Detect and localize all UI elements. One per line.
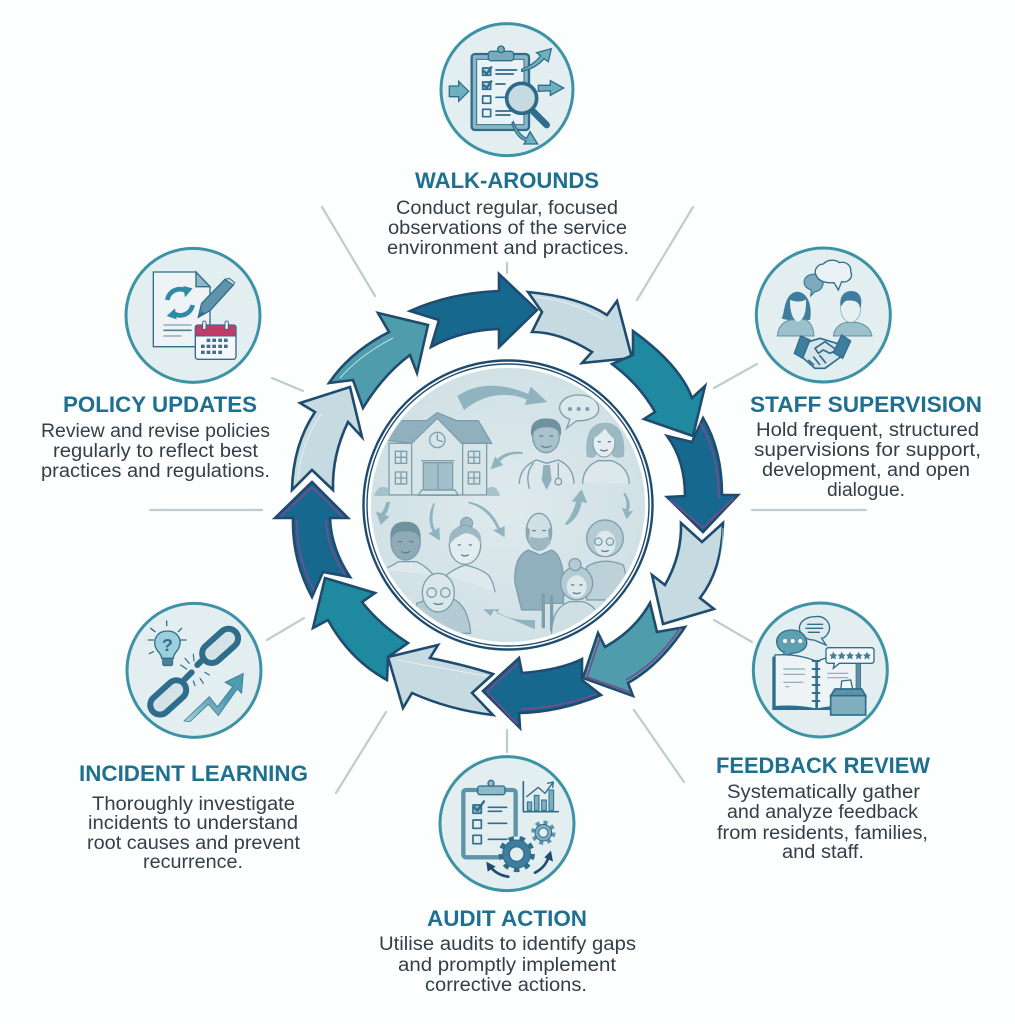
step: staff supervision	[750, 248, 982, 501]
text block: recurrence.	[143, 852, 243, 873]
arrow 6 mid teal	[583, 603, 685, 696]
nurse with bun	[447, 517, 495, 592]
heading: FEEDBACK REVIEW	[716, 753, 930, 778]
heading: WALK-AROUNDS	[415, 168, 599, 193]
speech bubble	[560, 395, 599, 428]
text block: supervisions for support,	[754, 440, 981, 461]
icon: bulb, broken chain, rising arrow	[127, 603, 261, 737]
text block: and staff.	[782, 842, 864, 863]
older woman seated	[551, 558, 596, 634]
step: walk-arounds	[387, 24, 629, 259]
text block: and analyze feedback	[727, 802, 919, 823]
older woman with glasses	[587, 520, 626, 600]
cycle arrows in illustration	[376, 386, 633, 629]
icon: bulb, broken chain, rising arrow: ?	[162, 635, 173, 655]
text block: Thoroughly investigate	[92, 794, 295, 815]
step: policy updates	[41, 248, 270, 482]
text block: observations of the service	[388, 218, 627, 239]
arrow 11 light	[292, 387, 362, 490]
cycle of twelve arrows	[275, 274, 738, 728]
heading: AUDIT ACTION	[427, 906, 587, 931]
icon: clipboard with magnifier	[441, 24, 573, 156]
arrow 5 light	[652, 523, 723, 624]
text block: dialogue.	[827, 480, 905, 501]
icon: clipboard, chart and gears	[440, 757, 574, 891]
arrow 8 light	[388, 645, 493, 715]
heading: POLICY UPDATES	[63, 392, 257, 417]
text block: Hold frequent, structured	[756, 420, 979, 441]
text block: corrective actions.	[425, 975, 587, 996]
doctor	[519, 418, 574, 490]
arrow 10 dark blue	[275, 482, 350, 597]
text block	[387, 198, 629, 259]
text block: and promptly implement	[398, 955, 617, 976]
house	[374, 413, 500, 496]
text block	[41, 421, 270, 482]
text block: Review and revise policies	[41, 421, 270, 442]
text block: from residents, families,	[717, 823, 928, 844]
text block	[87, 794, 301, 873]
central illustration: care home and people	[364, 360, 652, 650]
heading: INCIDENT LEARNING	[79, 761, 308, 786]
step: audit action	[379, 757, 636, 996]
text block: root causes and prevent	[87, 833, 301, 854]
text block: environment and practices.	[387, 238, 629, 259]
text block	[717, 782, 928, 863]
text block	[754, 420, 981, 501]
arrow 12 mid teal	[329, 313, 428, 408]
arrow 4 dark blue	[667, 418, 738, 532]
icon: book, bubbles, rating, ballot box	[753, 603, 887, 737]
heading: STAFF SUPERVISION	[750, 392, 982, 417]
text block: development, and open	[762, 460, 970, 481]
text block: practices and regulations.	[41, 461, 270, 482]
text block: regularly to reflect best	[53, 441, 259, 462]
arrow 3 teal	[612, 331, 705, 436]
nurse	[583, 423, 629, 483]
man	[383, 522, 433, 575]
step: feedback review	[716, 603, 930, 863]
text block: incidents to understand	[88, 813, 298, 834]
text block: Utilise audits to identify gaps	[379, 934, 636, 955]
arrow 7 dark blue	[483, 658, 601, 728]
arrow 9 teal	[313, 578, 408, 680]
text block: Conduct regular, focused	[396, 198, 618, 219]
text block: Systematically gather	[727, 782, 921, 803]
icon: two people and handshake	[756, 248, 890, 382]
arrow 1 dark blue	[410, 274, 537, 347]
text block	[379, 934, 636, 996]
older man with cane	[515, 513, 564, 630]
arrow 2 light	[528, 292, 632, 363]
older man with glasses	[417, 573, 471, 633]
icon: document, pen and calendar	[126, 248, 260, 382]
step: incident learning	[79, 603, 308, 873]
